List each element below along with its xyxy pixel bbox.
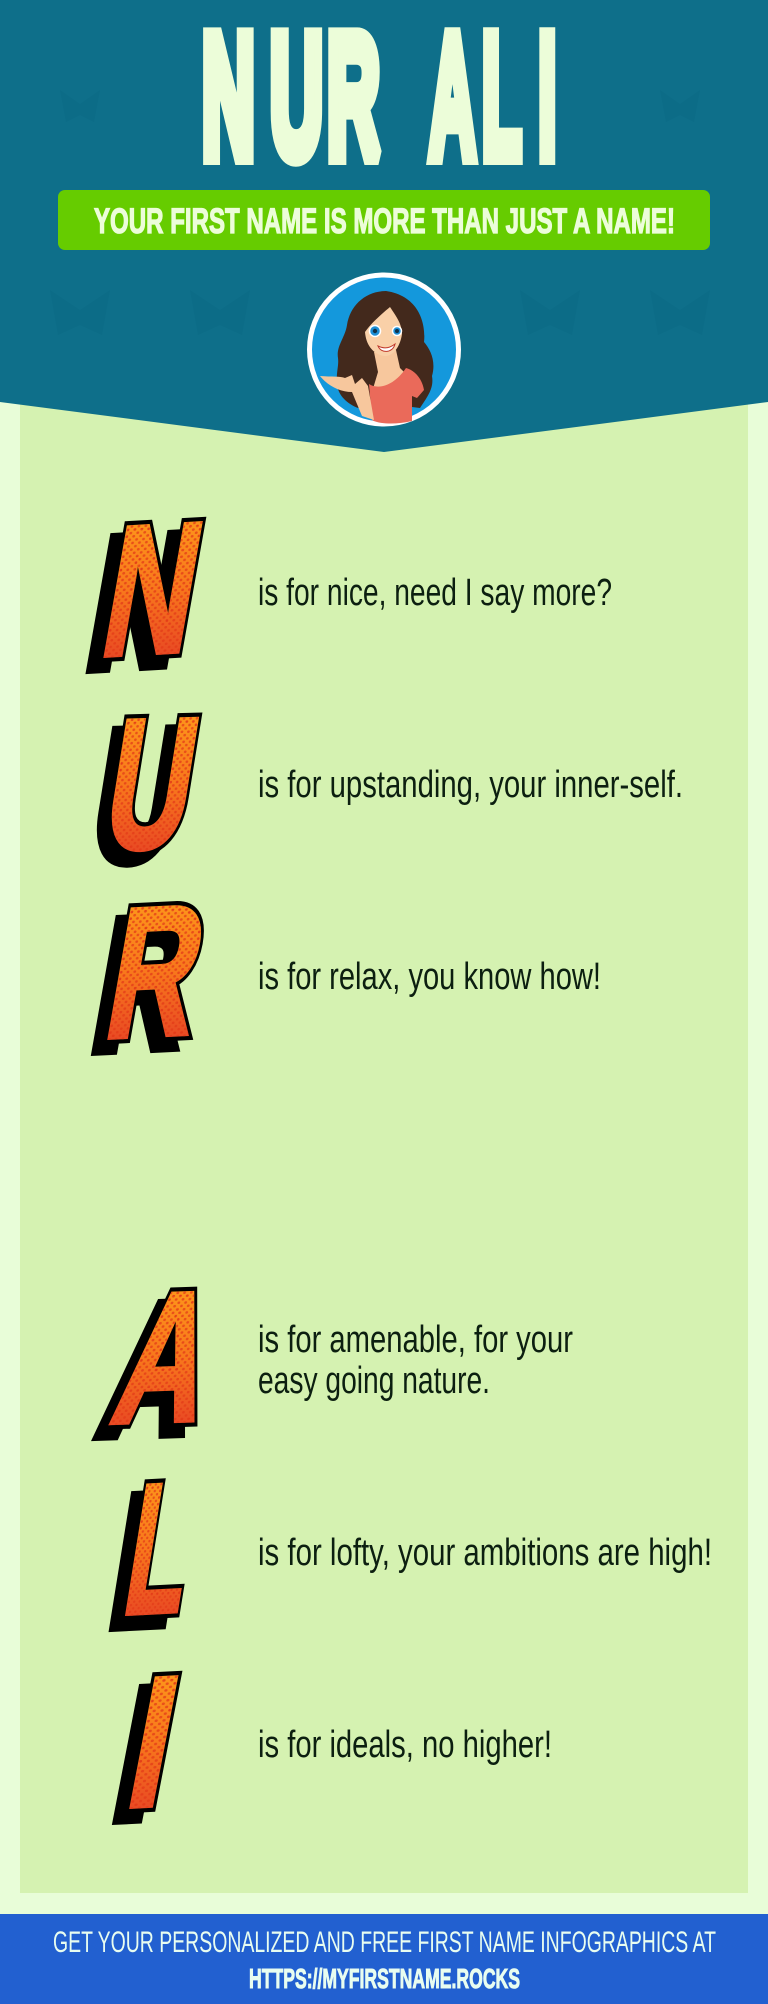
arm and hand	[320, 375, 374, 420]
letter L: L	[114, 1443, 207, 1654]
footer	[0, 1914, 768, 2004]
mouth	[378, 344, 395, 351]
letter N: N	[90, 482, 216, 696]
letter N: N	[90, 482, 216, 696]
text: R line: is for relax, you know how!	[258, 956, 601, 998]
letter N: N	[76, 494, 202, 707]
title: ALI	[429, 0, 556, 193]
letter L: L	[114, 1443, 207, 1654]
hair	[337, 291, 433, 408]
letter A: A	[99, 1252, 236, 1462]
text: A lines: is for amenable, for your	[258, 1319, 573, 1361]
footer: HTTPS://MYFIRSTNAME.ROCKS	[249, 1963, 520, 1994]
letter I: I	[101, 1649, 180, 1859]
text: A lines	[258, 1319, 573, 1402]
text: N line: is for nice, need I say more?	[258, 572, 612, 614]
icon: woman avatar	[310, 275, 458, 424]
letter U: U	[93, 679, 211, 889]
neck	[372, 350, 408, 392]
letter L: L	[114, 1443, 207, 1654]
panel: header banner	[0, 0, 768, 452]
face	[365, 307, 402, 356]
letter R: R	[94, 865, 219, 1078]
letter A: A	[86, 1263, 223, 1474]
letter A: A	[99, 1252, 236, 1462]
letter A: A	[99, 1252, 236, 1462]
text: I line: is for ideals, no higher!	[258, 1724, 552, 1766]
letter I: I	[114, 1638, 193, 1847]
text: A lines: easy going nature.	[258, 1360, 490, 1402]
letter R: R	[94, 865, 219, 1078]
letter R: R	[94, 865, 219, 1078]
letter R: R	[81, 877, 206, 1089]
letter N: N	[90, 482, 216, 696]
title	[202, 0, 556, 194]
letter U: U	[93, 679, 211, 889]
letter U: U	[81, 691, 199, 901]
panel: letters background	[20, 300, 748, 1893]
letter L: L	[100, 1454, 193, 1665]
letter I: I	[114, 1638, 193, 1847]
letter U: U	[93, 679, 211, 889]
eyes	[370, 326, 380, 336]
subtitle banner	[58, 190, 710, 250]
shirt	[369, 368, 424, 424]
letter I: I	[114, 1638, 193, 1847]
title: NUR	[202, 0, 380, 194]
